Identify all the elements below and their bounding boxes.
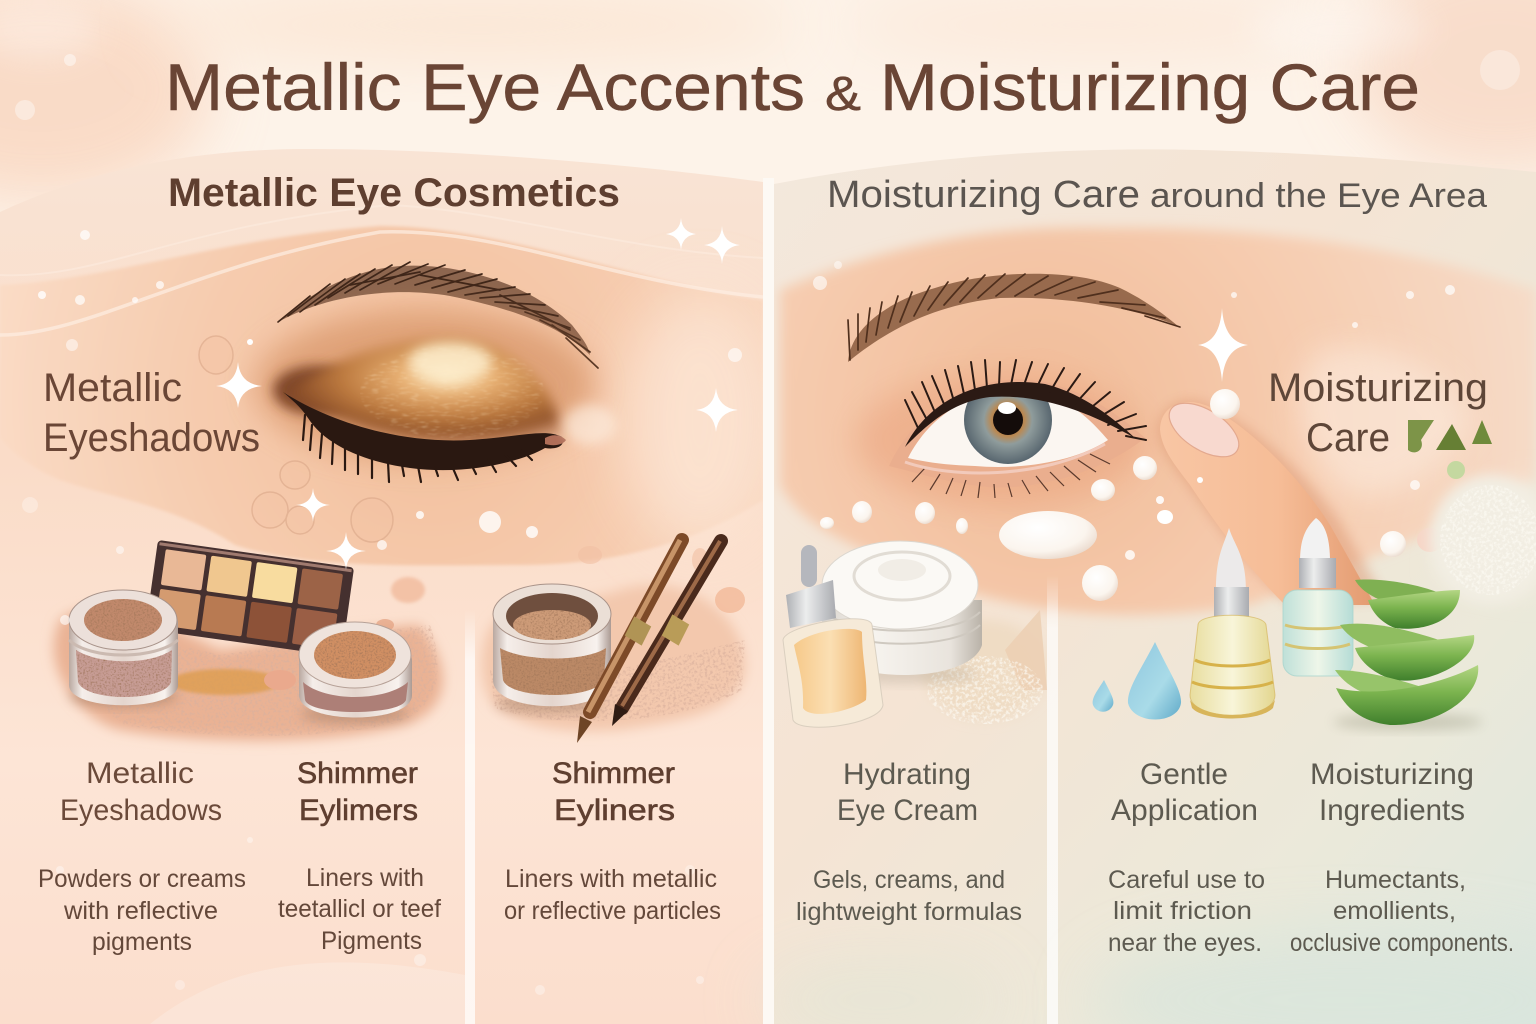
decorative wave bottom left	[150, 962, 465, 1024]
title: Metallic Eye Accents	[165, 50, 805, 124]
label: moisturizing care: Care	[1306, 416, 1390, 460]
group: shimmer eyeliner products	[482, 540, 745, 743]
heading: shimmer eyliners: Eyliners	[554, 794, 675, 827]
icon: green leaf accents	[1408, 420, 1492, 479]
description: or reflective particles	[504, 897, 721, 925]
description: Powders or creams	[38, 865, 246, 893]
description: pigments	[92, 928, 192, 956]
description: emollients,	[1333, 897, 1456, 925]
column: moisturizing ingredients	[1290, 758, 1514, 957]
label: metallic eyeshadows: Metallic	[43, 366, 182, 410]
icon: aloe vera slices	[1333, 580, 1483, 730]
description: Humectants,	[1325, 866, 1466, 894]
column: metallic eyeshadows	[38, 757, 246, 956]
description: near the eyes.	[1108, 929, 1262, 957]
icon: clear dropper bottle	[1283, 518, 1353, 676]
column: gentle application	[1108, 758, 1265, 957]
icon: glitter jar right	[299, 622, 412, 723]
icon: glitter jar left	[69, 590, 178, 706]
panel dividers	[465, 178, 1058, 1024]
icon: open eye	[848, 274, 1180, 506]
heading: gentle application: Gentle	[1140, 758, 1228, 791]
icon: glitter jar	[493, 584, 611, 713]
column: hydrating eye cream	[796, 758, 1022, 926]
description: Gels, creams, and	[813, 866, 1005, 894]
group: hydrating cream products	[783, 541, 982, 727]
description: Liners with metallic	[505, 865, 717, 893]
icon: amber dropper bottle	[783, 545, 883, 727]
label: moisturizing care: Moisturizing	[1268, 366, 1488, 410]
icon: cream jar	[822, 541, 982, 683]
group: metallic eyeshadow products	[54, 540, 443, 741]
group: moisturizing ingredient products	[1093, 420, 1492, 730]
description: Careful use to	[1108, 866, 1265, 894]
heading: shimmer eyliners: Shimmer	[552, 757, 675, 790]
icon: eyeshadow palette	[145, 540, 354, 657]
description: with reflective	[63, 897, 218, 925]
icon: cream drops	[820, 456, 1443, 601]
column: shimmer eyeliners first	[278, 757, 441, 955]
heading: hydrating eye cream: Eye Cream	[837, 794, 978, 827]
heading: moisturizing ingredients: Ingredients	[1319, 794, 1465, 827]
title: &	[825, 68, 861, 121]
sparkles	[22, 218, 1455, 995]
heading: moisturizing ingredients: Moisturizing	[1310, 758, 1474, 791]
column: shimmer eyeliners second	[504, 757, 721, 925]
heading: shimmer eylimers: Shimmer	[297, 757, 418, 790]
heading: shimmer eylimers: Eylimers	[299, 794, 418, 827]
label: metallic eyeshadows: Eyeshadows	[43, 416, 260, 460]
description: teetallicl or teef	[278, 895, 441, 923]
description: occlusive components.	[1290, 929, 1514, 957]
icon: closed eye with metallic eyeshadow	[255, 262, 616, 482]
heading: metallic eye cosmetics: Metallic Eye Cosmetics	[168, 171, 620, 215]
description: Pigments	[321, 927, 422, 955]
icon: large water drop	[1128, 642, 1181, 720]
skin area: open eye face	[780, 228, 1536, 615]
icon: powder smear	[482, 546, 745, 731]
icon: fingertip applying cream	[1158, 389, 1385, 605]
panel: metallic eye cosmetics	[0, 149, 780, 1024]
description: Liners with	[306, 864, 424, 892]
heading: metallic eyeshadows: Eyeshadows	[60, 794, 222, 827]
heading: gentle application: Application	[1111, 794, 1258, 827]
description: lightweight formulas	[796, 898, 1022, 926]
title: Moisturizing Care	[880, 50, 1420, 124]
icon: powder splash under eye	[199, 336, 393, 542]
icon: small water drop	[1093, 680, 1113, 712]
icon: powder smear	[54, 577, 443, 741]
icon: eyeliner pens	[577, 540, 721, 743]
icon: oil dropper bottle	[1190, 528, 1275, 718]
heading: moisturizing care around the eye area: Moisturizing Care	[827, 174, 1140, 216]
heading: metallic eyeshadows: Metallic	[86, 757, 194, 790]
heading: hydrating eye cream: Hydrating	[843, 758, 971, 791]
description: limit friction	[1113, 897, 1252, 925]
skin area: closed eye face	[0, 205, 780, 565]
heading: moisturizing care around the eye area: around the Eye Area	[1150, 177, 1487, 215]
icon: powder dust	[923, 475, 1536, 724]
